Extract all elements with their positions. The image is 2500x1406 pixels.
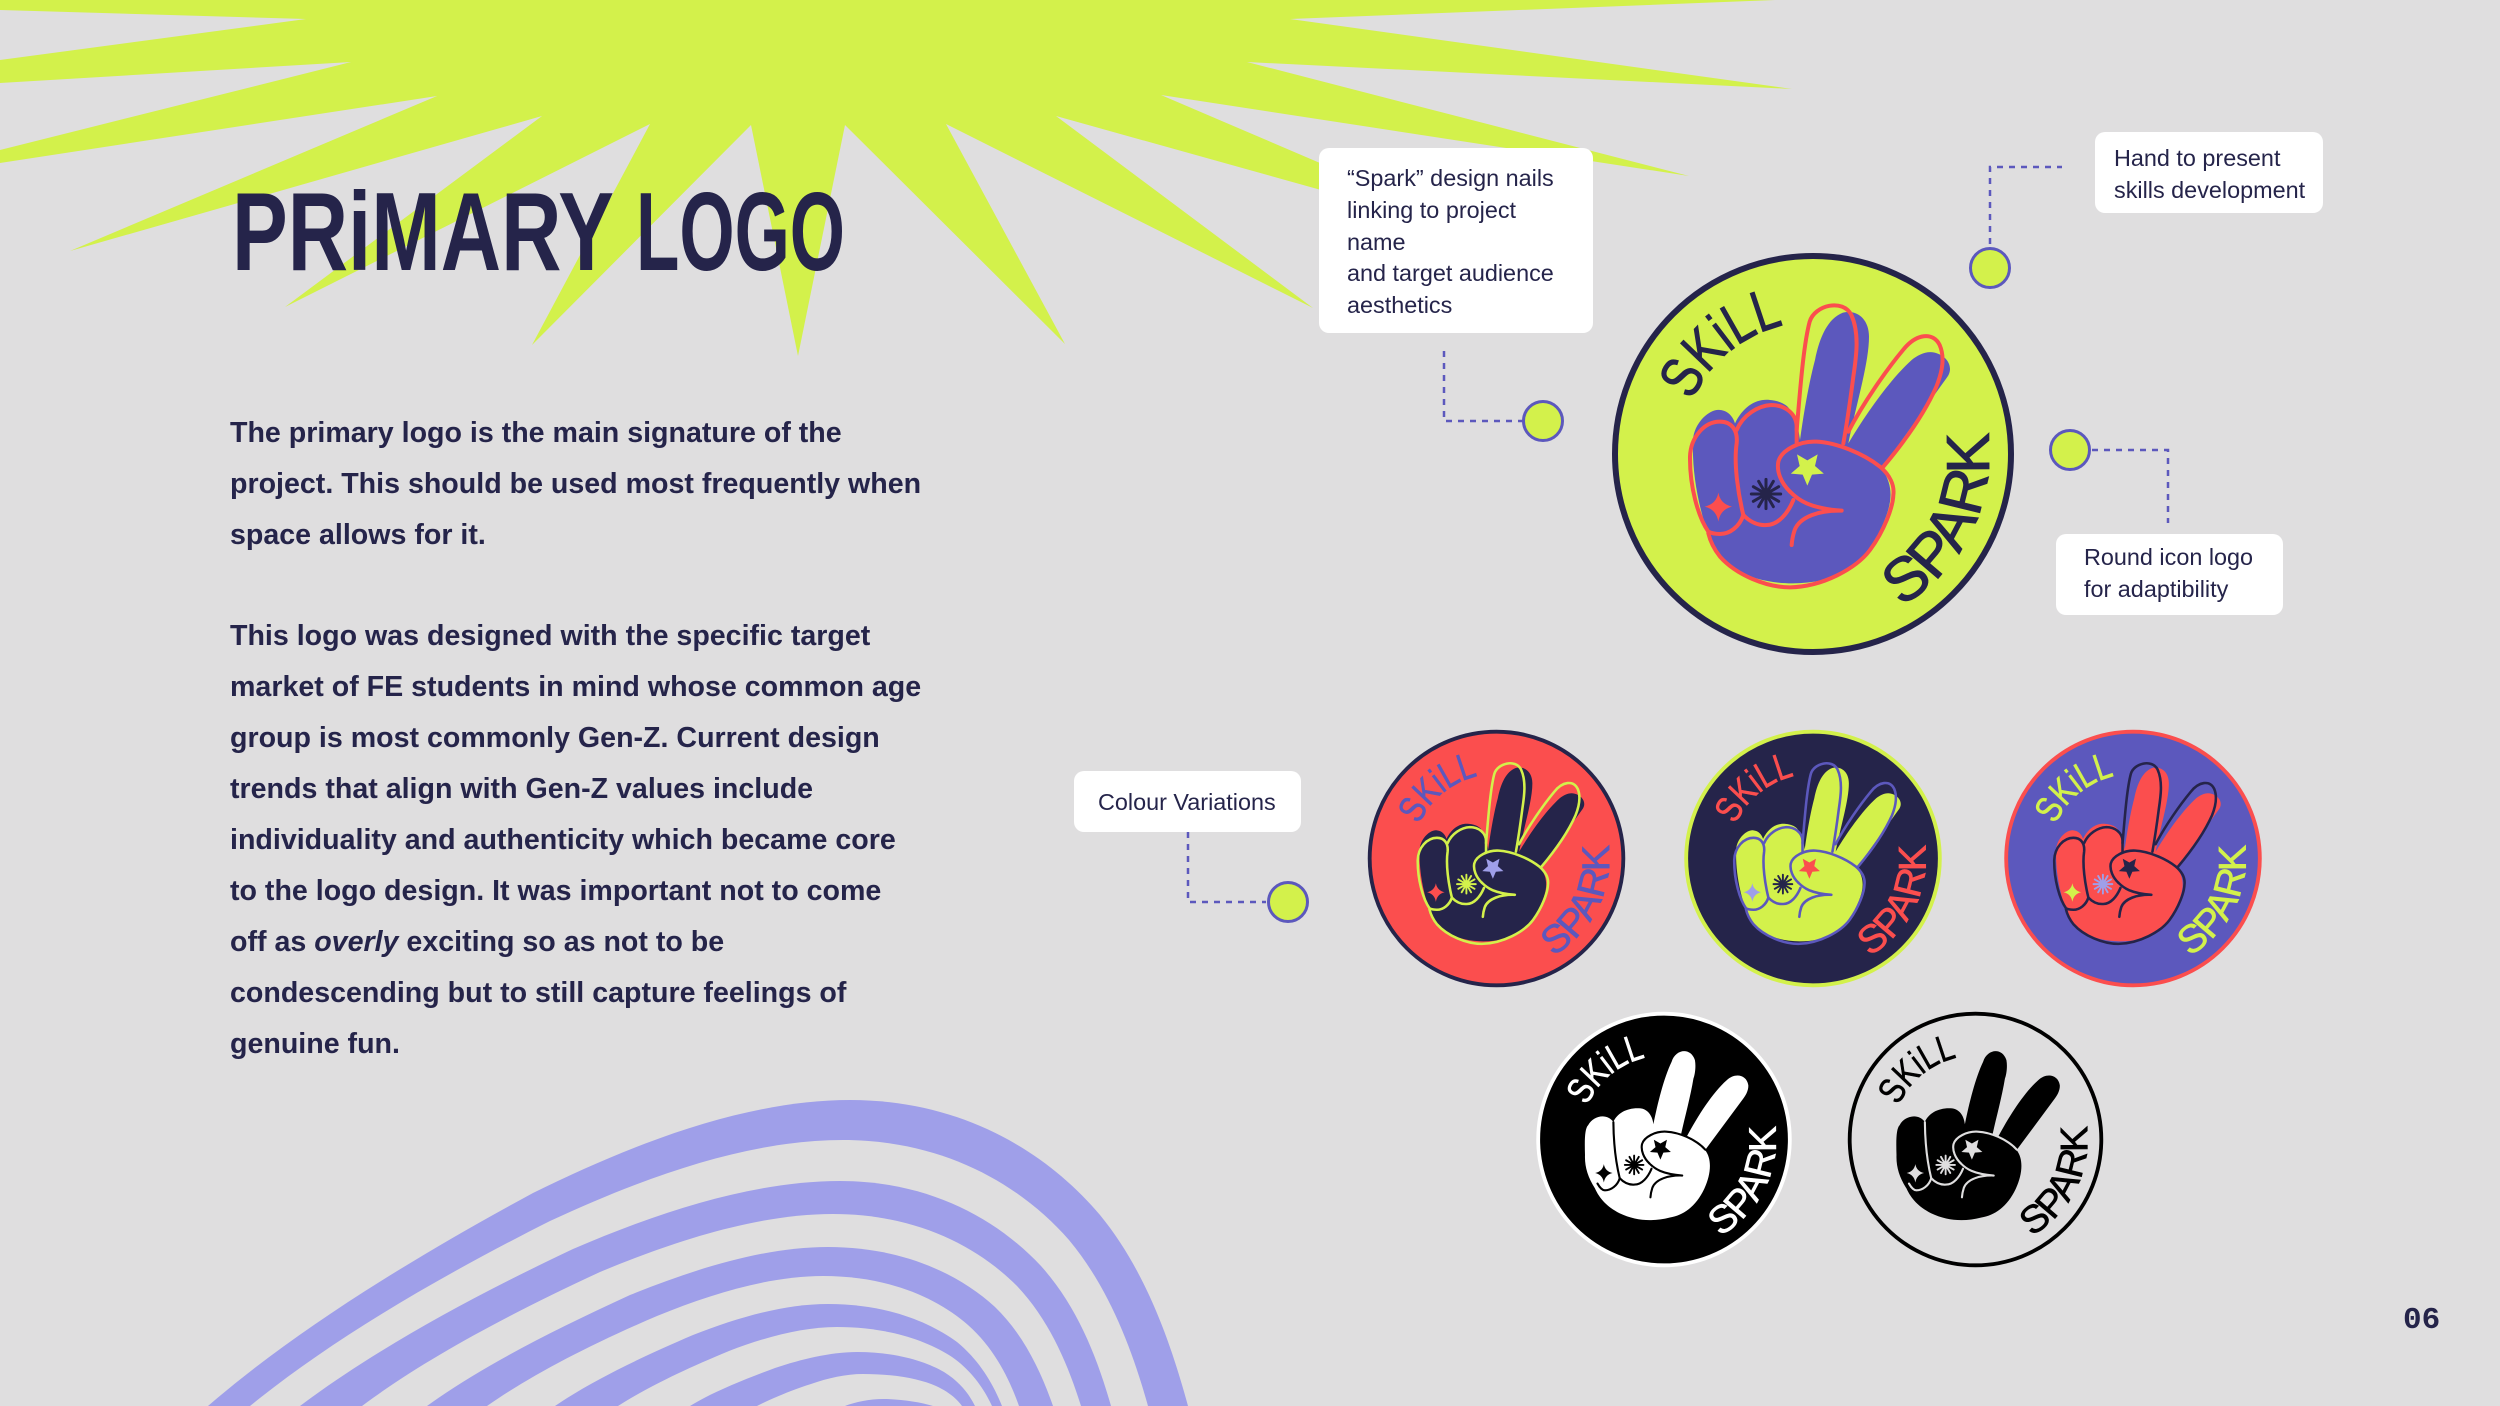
logo variation: navy [1684, 730, 1942, 988]
primary logo: lime: SPARK [1884, 432, 1990, 602]
title: LOGO [636, 170, 845, 294]
callout: spark design nails: and target audience [1347, 260, 1554, 286]
callout: hand: Hand to present [2114, 145, 2281, 171]
primary logo: lime: SKiLL [1661, 292, 1783, 396]
callout: colour variations: Colour Variations [1098, 789, 1276, 815]
body text: individuality and authenticity which became core [230, 824, 896, 856]
body text: trends that align with Gen-Z values include [230, 773, 813, 805]
callout: spark design nails: aesthetics [1347, 292, 1452, 318]
body text: condescending but to still capture feelings of [230, 977, 847, 1009]
page number: 06 [2403, 1303, 2440, 1338]
callout: round icon: for adaptibility [2084, 576, 2229, 602]
connector: spark callout to marker [1444, 351, 1562, 440]
title: PRiMARY [232, 170, 614, 294]
callout: hand: skills development [2114, 177, 2306, 203]
connector: round icon callout to marker [2050, 430, 2168, 523]
callout: spark design nails: “Spark” design nails [1347, 165, 1554, 191]
callout: spark design nails [1319, 148, 1593, 333]
body text: off as overly exciting so as not to be [230, 926, 724, 958]
body text: market of FE students in mind whose common age [230, 671, 921, 703]
body text: The primary logo is the main signature of the [230, 417, 842, 449]
logo variation: white: SKiLL [1879, 1036, 1956, 1102]
logo variation: white [1848, 1012, 2104, 1268]
logo variation: black [1536, 1012, 1792, 1268]
callout: colour variations [1074, 771, 1301, 832]
logo variation: navy: SPARK [1858, 844, 1926, 953]
logo variation: black: SKiLL [1568, 1036, 1645, 1102]
body text: This logo was designed with the specific target [230, 620, 871, 652]
callout: spark design nails: linking to project [1347, 197, 1517, 223]
callout: hand [2095, 132, 2323, 213]
logo variation: indigo: SPARK [2178, 844, 2246, 953]
callout: round icon [2056, 534, 2283, 615]
logo variation: navy: SKiLL [1716, 754, 1794, 821]
body text [230, 417, 921, 1060]
logo variation: white: SPARK [2020, 1126, 2088, 1233]
logo variation: indigo: SKiLL [2036, 754, 2114, 821]
connector: hand callout to marker [1970, 167, 2062, 288]
logo variation: indigo [2004, 730, 2262, 988]
body text: genuine fun. [230, 1028, 400, 1060]
callout: spark design nails: name [1347, 229, 1406, 255]
concentric arcs decoration [208, 1100, 1188, 1406]
logo variation: red: SPARK [1542, 844, 1610, 953]
body text: project. This should be used most frequently when [230, 468, 921, 500]
connector: colour variations to marker [1188, 832, 1308, 922]
logo variation: black: SPARK [1709, 1126, 1776, 1233]
primary logo: lime [1612, 253, 2014, 655]
logo variation: red: SKiLL [1399, 754, 1478, 821]
body text: space allows for it. [230, 519, 486, 551]
sunburst decoration [0, 0, 1792, 356]
logo variation: red [1368, 730, 1626, 988]
body text: group is most commonly Gen-Z. Current design [230, 722, 880, 754]
callout: round icon: Round icon logo [2084, 544, 2253, 570]
body text: to the logo design. It was important not to come [230, 875, 881, 907]
